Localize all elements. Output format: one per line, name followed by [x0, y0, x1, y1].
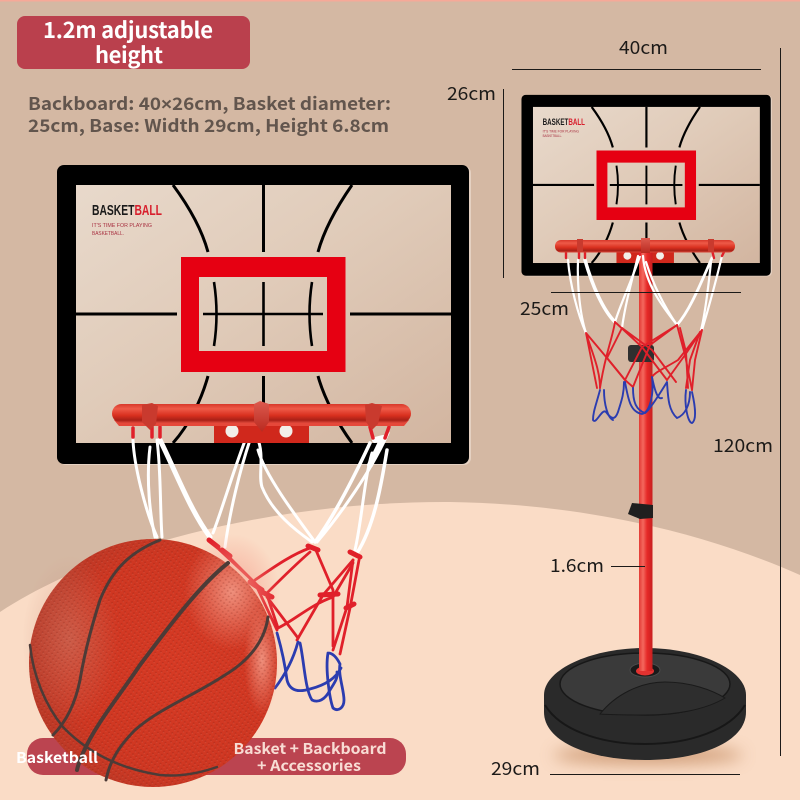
- large hoop rim: [112, 401, 411, 443]
- pole clamp: [628, 503, 653, 519]
- red shooting square: [181, 257, 346, 372]
- specification text: Backboard: 40 ×26cm, Basket diameter:: [28, 91, 391, 116]
- telescopic pole: [628, 250, 654, 671]
- label: basket, backboard and accessories: + Accessories: [257, 755, 361, 776]
- label: basket, backboard and accessories: [234, 738, 386, 776]
- title badge: 1.2m adjustable: [43, 13, 213, 45]
- dimension: 120cm: 120cm: [713, 432, 773, 458]
- large hoop net: [133, 426, 389, 710]
- dimension: 29cm: 29cm: [491, 755, 540, 781]
- large backboard: [57, 165, 471, 465]
- backboard logo: BASKETBALL: [92, 202, 162, 219]
- small hoop rim: [555, 238, 735, 253]
- small backboard: BASKETBALL.: [543, 134, 562, 138]
- dimension: 1.6cm: 1.6cm: [550, 552, 604, 578]
- stand base: [544, 648, 746, 760]
- specification text: 25cm, Base: Width 29cm, Height 6.8cm: [28, 113, 389, 138]
- specification text: [28, 91, 391, 138]
- backboard logo: IT'S TIME FOR PLAYING: [92, 223, 152, 229]
- backboard logo: BASKETBALL.: [92, 231, 124, 237]
- dimension: 25cm: 25cm: [520, 295, 569, 321]
- base shadow: [553, 746, 743, 764]
- backboard logo: [92, 202, 162, 237]
- small backboard: IT'S TIME FOR PLAYING: [543, 129, 579, 133]
- dimension: 1.6cm: [550, 552, 645, 578]
- title badge: [17, 13, 250, 70]
- dimension: 26cm: 26cm: [447, 80, 496, 106]
- small backboard: BASKETBALL: [543, 117, 585, 127]
- title badge: height: [95, 38, 163, 70]
- label: basket, backboard and accessories: Basket + Backboard: [234, 738, 386, 759]
- dimension: 40cm: 40cm: [619, 34, 668, 60]
- small hoop net: [566, 248, 725, 423]
- small backboard: [521, 95, 772, 276]
- bottom label pill: [27, 738, 406, 775]
- label: basketball: Basketball: [16, 747, 98, 768]
- basketball: [22, 534, 280, 787]
